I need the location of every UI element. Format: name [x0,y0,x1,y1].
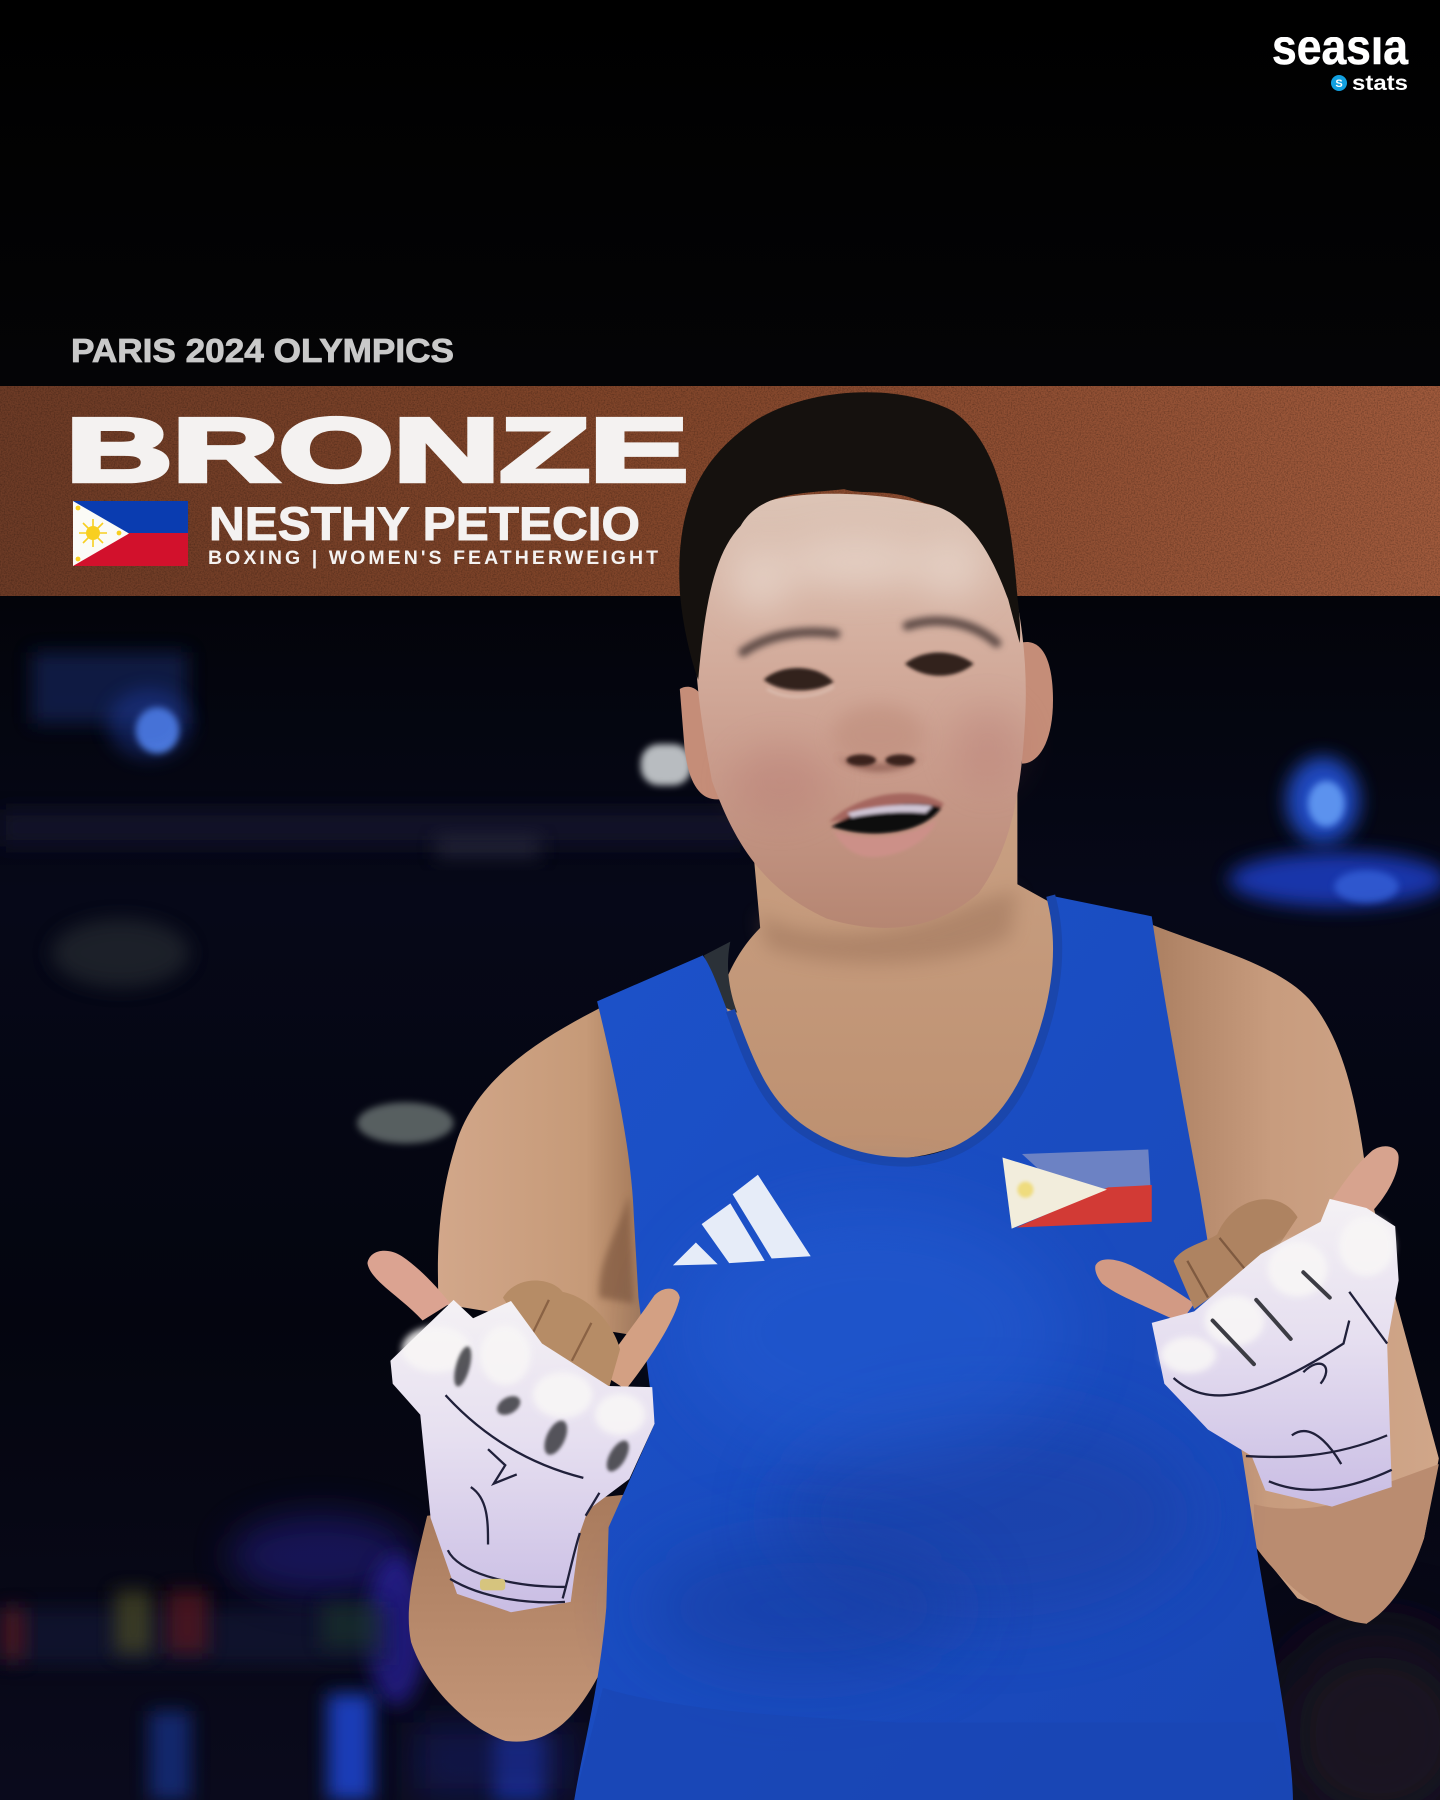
logo: seasia stats: stats [1352,72,1408,95]
right arm [1137,919,1439,1624]
undershirt [704,942,737,1013]
cheek shading [733,705,1022,818]
left hand: fingers [367,1251,680,1389]
hair [679,392,1020,680]
nose [833,705,924,771]
logo: seasia stats [1273,37,1409,91]
neck and chest [718,792,1059,1159]
event subtitle: BOXING | WOMEN'S FEATHERWEIGHT [208,547,658,569]
eyes [764,653,974,697]
athlete name: NESTHY PETECIO [209,497,640,550]
left arm [409,1008,649,1742]
chest shading [758,890,1017,963]
eyebrow heading: PARIS 2024 OLYMPICS [71,332,454,369]
bronze leather band [0,386,1440,596]
logo: seasia stats: seasia [1272,19,1409,75]
head: ears [680,642,1053,799]
forehead sheen [730,539,983,612]
eyebrows [743,621,997,652]
chest flag patch [1002,1149,1152,1229]
athlete figure [367,392,1439,1800]
head: face [696,494,1026,928]
title: medal: BRONZE [66,401,688,501]
left hand wrap [390,1300,655,1612]
mouth [829,793,944,857]
right hand: fingers [1095,1146,1399,1323]
blue tank top [574,896,1293,1800]
icon: Philippine flag [73,501,188,566]
right hand wrap [1152,1199,1399,1507]
icon: three-stripe logo [673,1175,811,1265]
logo: seasia stats: S [1335,78,1343,90]
